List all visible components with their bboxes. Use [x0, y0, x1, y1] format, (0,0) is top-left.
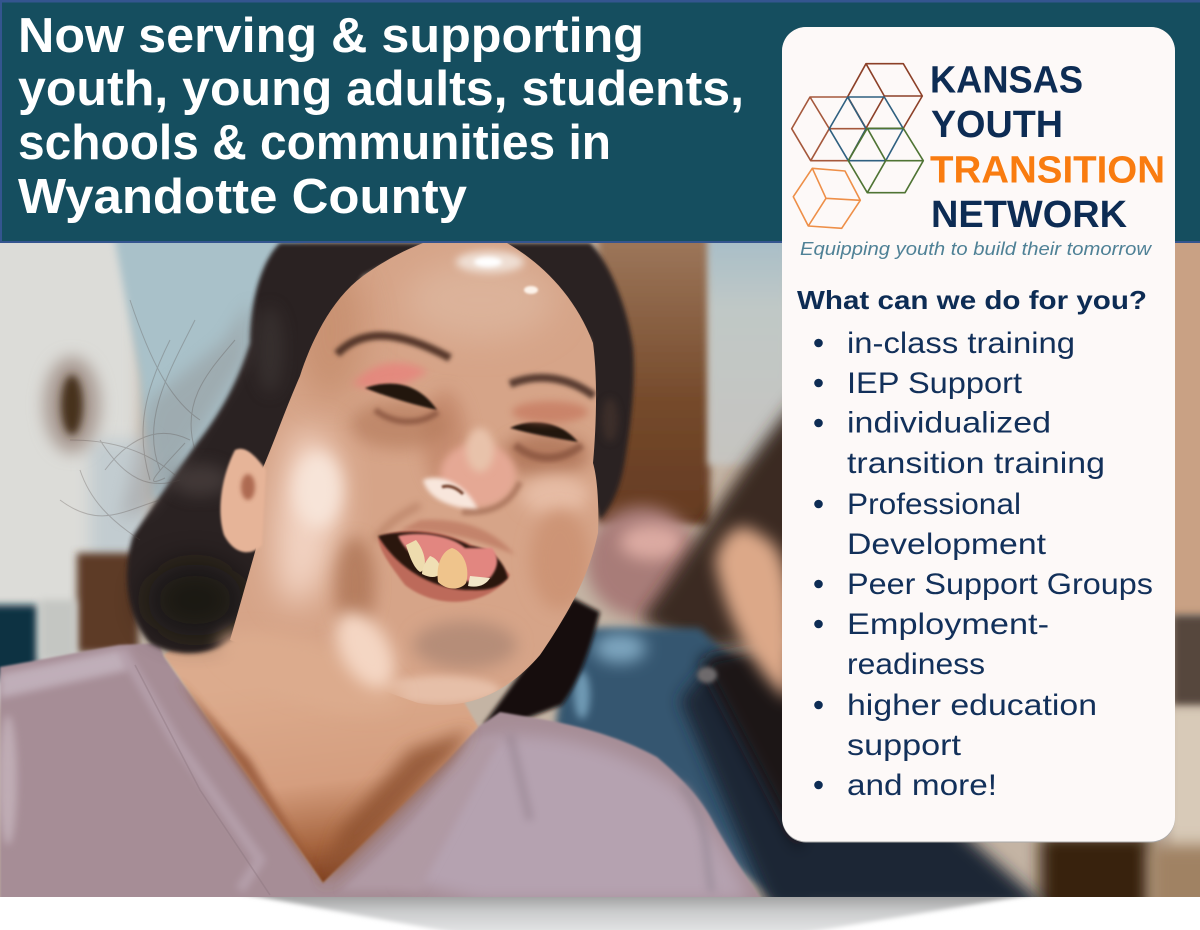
services list: higher education: [847, 689, 1097, 722]
logo wordmark: YOUTH: [931, 104, 1063, 146]
eyes and brows: [337, 336, 594, 458]
smile: [378, 520, 515, 602]
services list: support: [847, 729, 962, 762]
services list: IEP Support: [847, 367, 1023, 400]
panel: services card: [782, 27, 1175, 842]
title: Now serving & supporting: [18, 9, 644, 63]
services list: individualized: [847, 406, 1051, 440]
face: [225, 243, 605, 713]
background person: [555, 395, 1050, 910]
logo wordmark: NETWORK: [931, 194, 1128, 236]
heading: what can we do: What can we do for you?: [797, 285, 1147, 315]
title: Wyandotte County: [18, 170, 467, 224]
logo wordmark: [930, 60, 1165, 236]
header banner: [0, 0, 1200, 243]
nose: [376, 428, 520, 540]
services list: and more!: [847, 769, 997, 802]
shirt: [0, 643, 762, 900]
services list: [814, 327, 1153, 802]
services list: transition training: [847, 447, 1105, 480]
logo wordmark: KANSAS: [930, 60, 1083, 102]
flyaway hair wisps: [60, 300, 250, 540]
hair: [60, 243, 634, 653]
blurred background: [0, 225, 1200, 915]
photo: smiling young woman: [0, 225, 1200, 915]
neck: [164, 647, 478, 887]
logo wordmark: TRANSITION: [930, 150, 1165, 192]
services list: Employment-: [847, 608, 1049, 641]
bottom drop shadow: [232, 892, 1048, 930]
services list: Professional: [847, 488, 1021, 521]
jaw blend into neck: [208, 602, 402, 698]
services list: Peer Support Groups: [847, 568, 1153, 601]
hair under chin: [483, 598, 600, 725]
skin tones: [300, 280, 370, 400]
services list: in-class training: [847, 327, 1075, 360]
title: schools & communities in: [18, 116, 611, 170]
services list: readiness: [847, 648, 985, 681]
title: [18, 9, 744, 224]
ear: [220, 449, 266, 552]
logo: hexagonal cubes: [792, 64, 923, 228]
tagline: Equipping youth to build their tomorrow: [800, 239, 1152, 259]
services list: Development: [847, 528, 1047, 561]
title: youth, young adults, students,: [18, 62, 744, 116]
